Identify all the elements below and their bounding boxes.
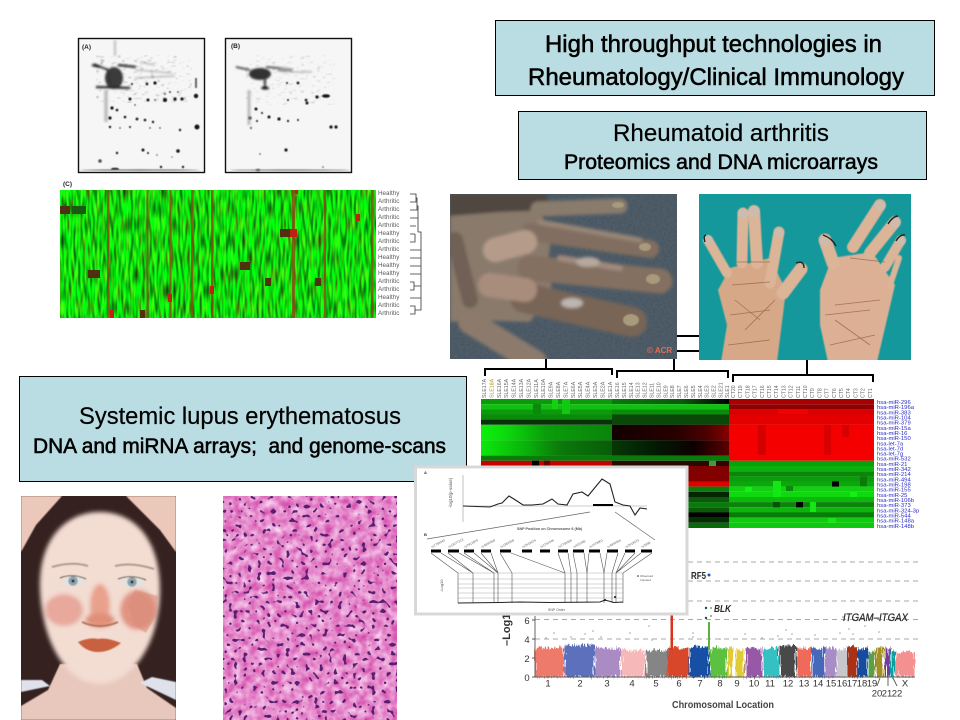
axes: [532, 616, 915, 686]
axis numbers: 18: [857, 678, 867, 690]
column labels: SLE and control samples: SLE13A: [519, 378, 525, 398]
SLE untreated column block: [481, 399, 612, 466]
sample labels: Arthritic: [378, 278, 399, 285]
column labels: SLE and control samples: SLE8A: [556, 381, 562, 398]
column labels: SLE and control samples: SLE2A: [600, 381, 606, 398]
column labels: SLE and control samples: SLE2: [712, 385, 718, 398]
column labels: SLE and control samples: CT9: [810, 388, 816, 398]
gel panel A: (A): [82, 44, 91, 51]
column labels: SLE and control samples: SLE3A: [593, 381, 599, 398]
sample labels: [378, 190, 400, 317]
miRNA row labels: hsa-miR-25: [877, 493, 908, 499]
heatmap C: proteomics: (C): [63, 181, 72, 188]
column labels: SLE and control samples: SLE12A: [526, 378, 532, 398]
column labels: SLE and control samples: CT14: [774, 385, 780, 398]
column labels: SLE and control samples: SLE7A: [563, 381, 569, 398]
miRNA row labels: hsa-miR-21: [877, 462, 907, 468]
column labels: SLE and control samples: CT11: [796, 386, 802, 398]
miRNA row labels: [877, 400, 920, 530]
photo: deformed hands: [699, 194, 911, 362]
SNP identifiers: rs13277113: [448, 537, 464, 549]
column labels: SLE and control samples: SLE14A: [512, 378, 518, 398]
miRNA row labels: hsa-miR-15a: [877, 426, 911, 432]
connector lines: [485, 336, 873, 382]
column labels: SLE and control samples: CT16: [760, 385, 766, 398]
lower SNP chart: -Log10: [439, 579, 444, 592]
heatmap C: proteomics: [60, 181, 376, 318]
SNP identifiers: rs2736340: [431, 538, 446, 549]
miRNA row labels: hsa-miR-148a: [877, 519, 915, 525]
column labels: SLE and control samples: SLE1: [725, 385, 731, 398]
sample labels: Arthritic: [378, 214, 399, 221]
sample labels: Arthritic: [378, 286, 399, 293]
heading: rheumatoid arthritis: Rheumatoid arthritis: [613, 120, 829, 147]
sample labels: Arthritic: [378, 206, 399, 213]
column labels: SLE and control samples: SLE10A: [541, 378, 547, 398]
axis numbers: 2: [524, 654, 530, 665]
sample labels: Arthritic: [378, 310, 399, 317]
sample labels: Arthritic: [378, 198, 399, 205]
miRNA row labels: hsa-miR-106b: [877, 498, 915, 504]
gene labels: RF5: [691, 571, 706, 582]
axis numbers: 12: [783, 678, 793, 690]
axis numbers: 19: [867, 678, 877, 690]
column labels: SLE and control samples: SLE5A: [578, 381, 584, 398]
column labels: SLE and control samples: SLE7: [677, 385, 683, 398]
SLE treated column block: [612, 399, 729, 528]
axis numbers: 4: [524, 635, 530, 646]
sample labels: Healthy: [378, 270, 400, 277]
axis numbers: 22: [892, 688, 902, 700]
miRNA row labels: hsa-miR-373: [877, 503, 911, 509]
column labels: SLE and control samples: SLE10: [656, 382, 662, 398]
column labels: SLE and control samples: SLE11A: [534, 379, 540, 398]
lower SNP chart: Observed: [640, 574, 653, 578]
column labels: SLE and control samples: SLE4A: [586, 381, 592, 398]
SNP identifiers: [431, 537, 651, 549]
association curve: SNP Position on Chromosome 8 (Mb): [517, 527, 583, 531]
heading: systemic lupus erythematosus: DNA and miRNA arrays; and genome-scans: [33, 435, 446, 458]
sample labels: Healthy: [378, 230, 400, 237]
SNP identifiers: rs2736336: [558, 538, 573, 549]
miRNA row labels: hsa-miR-104: [877, 416, 911, 422]
column labels: SLE and control samples: SLE12: [643, 382, 649, 398]
axis numbers: 10: [749, 678, 759, 690]
photo: swollen hand: [450, 194, 677, 362]
column labels: SLE and control samples: SLE21: [718, 382, 724, 398]
sample labels: Arthritic: [378, 238, 399, 245]
sample labels: Healthy: [378, 262, 400, 269]
column labels: SLE and control samples: [482, 378, 874, 398]
column labels: SLE and control samples: CT1: [868, 388, 874, 398]
Manhattan plot: [501, 562, 920, 711]
miRNA row labels: hsa-miR-379: [877, 421, 911, 427]
association peaks: [545, 574, 880, 650]
title box: Rheumatology/Clinical Immunology: [528, 64, 904, 91]
miRNA row labels: hsa-miR-198: [877, 482, 911, 488]
column labels: SLE and control samples: SLE8: [670, 385, 676, 398]
miRNA row labels: hsa-miR-383: [877, 410, 911, 416]
column labels: SLE and control samples: SLE14: [629, 382, 635, 398]
association curve: [424, 470, 655, 540]
axis numbers: 6: [524, 616, 530, 627]
miRNA heatmap: [481, 399, 874, 528]
association curve: A: [424, 470, 427, 475]
axis numbers: 3: [604, 678, 610, 690]
axis numbers: 8: [717, 678, 723, 690]
gel panel B: [226, 38, 352, 172]
SNP identifiers: rs1478901: [589, 538, 604, 549]
miRNA row labels: hsa-miR-155: [877, 488, 911, 494]
y axis title: –Log10: [501, 607, 513, 646]
axis numbers: X: [902, 678, 909, 690]
lower SNP chart: SNP Order: [548, 608, 566, 612]
column labels: SLE and control samples: CT7: [825, 388, 831, 398]
gene labels: ITGAM–ITGAX: [843, 612, 909, 624]
axis numbers: 16: [837, 678, 847, 690]
miRNA row labels: hsa-miR-342: [877, 467, 911, 473]
photo: histology section: [223, 496, 397, 720]
miRNA row labels: hsa-miR-494: [877, 477, 911, 483]
miRNA row labels: hsa-let-7d: [877, 446, 903, 452]
column labels: SLE and control samples: SLE16: [615, 382, 621, 398]
photo: swollen hand: © ACR: [647, 346, 672, 355]
axis numbers: 0: [524, 673, 530, 684]
column labels: SLE and control samples: CT2: [861, 388, 867, 398]
column labels: SLE and control samples: CT3: [853, 388, 859, 398]
SNP bars: [431, 550, 652, 552]
axis numbers: 17: [847, 678, 857, 690]
column labels: SLE and control samples: SLE11: [650, 383, 656, 398]
association curve: B: [424, 532, 427, 537]
column labels: SLE and control samples: SLE18A: [489, 378, 495, 398]
column labels: SLE and control samples: SLE9: [663, 385, 669, 398]
axis numbers: 5: [653, 678, 659, 690]
heading: rheumatoid arthritis: [518, 112, 926, 180]
column labels: SLE and control samples: SLE5: [691, 385, 697, 398]
column labels: SLE and control samples: CT15: [767, 385, 773, 398]
miRNA row labels: hsa-miR-148b: [877, 524, 915, 530]
column labels: SLE and control samples: CT19: [738, 385, 744, 398]
sample labels: Healthy: [378, 294, 400, 301]
miRNA row labels: hsa-miR-16: [877, 431, 908, 437]
column labels: SLE and control samples: CT18: [745, 385, 751, 398]
axis numbers: 1: [545, 678, 551, 690]
sample labels: Healthy: [378, 254, 400, 261]
axis numbers: 14: [813, 678, 823, 690]
miRNA row labels: hsa-miR-544: [877, 514, 911, 520]
column labels: SLE and control samples: SLE17A: [482, 378, 488, 398]
miRNA row labels: hsa-miR-296: [877, 400, 911, 406]
photo: malar rash: [21, 496, 176, 720]
axis numbers: 7: [697, 678, 703, 690]
column labels: SLE and control samples: SLE1A: [608, 381, 614, 398]
sample labels: Arthritic: [378, 246, 399, 253]
column labels: SLE and control samples: CT5: [839, 388, 845, 398]
column labels: SLE and control samples: SLE15: [622, 382, 628, 398]
column labels: SLE and control samples: CT10: [803, 385, 809, 398]
x axis title: Chromosomal Location: [672, 699, 774, 711]
column labels: SLE and control samples: CT4: [846, 388, 852, 398]
threshold lines: [535, 562, 920, 639]
gel panel A: [78, 38, 204, 172]
axis numbers: [524, 616, 909, 700]
miRNA row labels: hsa-miR-532: [877, 457, 911, 463]
gel panel B: (B): [231, 43, 240, 50]
lower SNP chart: [431, 553, 653, 612]
lower SNP chart: Imputed: [640, 578, 651, 582]
miRNA row labels: hsa-miR-196a: [877, 405, 915, 411]
SNP identifiers: rs2618476: [522, 538, 537, 549]
column labels: SLE and control samples: CT8: [817, 388, 823, 398]
SNP identifiers: rs2254546: [540, 538, 555, 549]
gene labels: [691, 571, 909, 624]
SNP identifiers: rs1382568: [500, 538, 515, 549]
sample labels: Arthritic: [378, 222, 399, 229]
miRNA row labels: hsa-miR-214: [877, 472, 911, 478]
column labels: SLE and control samples: CT6: [832, 388, 838, 398]
SNP identifiers: rs2618473: [625, 538, 640, 549]
miRNA row labels: hsa-let-7g: [877, 452, 903, 458]
axis numbers: 6: [676, 678, 682, 690]
column labels: SLE and control samples: SLE4: [698, 385, 704, 398]
column labels: SLE and control samples: CT12: [789, 385, 795, 398]
column labels: SLE and control samples: SLE13: [636, 382, 642, 398]
axis numbers: 11: [765, 678, 775, 690]
column labels: SLE and control samples: CT13: [781, 385, 787, 398]
control column block: [729, 399, 874, 528]
miRNA row labels: hsa-miR-324-3p: [877, 508, 920, 514]
SNP identifiers: rs922483: [573, 539, 586, 549]
heading: systemic lupus erythematosus: [20, 376, 466, 482]
gene labels: BLK: [714, 603, 732, 615]
heading: rheumatoid arthritis: Proteomics and DNA microarrays: [564, 151, 878, 174]
title box: [496, 20, 934, 96]
sample labels: Arthritic: [378, 302, 399, 309]
miRNA row labels: hsa-let-7a: [877, 441, 904, 447]
SNP identifiers: rs4840565: [607, 538, 622, 549]
SNP identifiers: rs2898: [641, 541, 651, 549]
column labels: SLE and control samples: SLE3: [705, 385, 711, 398]
dendrogram: [410, 194, 421, 314]
title box: High throughput technologies in: [545, 31, 882, 58]
heading: systemic lupus erythematosus: Systemic lupus erythematosus: [79, 403, 401, 430]
miRNA row labels: hsa-miR-150: [877, 436, 911, 442]
column labels: SLE and control samples: CT17: [753, 385, 759, 398]
SNP identifiers: rs4840568: [481, 538, 496, 549]
sample labels: Healthy: [378, 190, 400, 197]
column labels: SLE and control samples: SLE16A: [497, 378, 503, 398]
column labels: SLE and control samples: CT20: [731, 385, 737, 398]
association curve: -log10(p-value): [448, 477, 453, 508]
axis numbers: 4: [629, 678, 635, 690]
SNP identifiers: rs7812879: [464, 538, 479, 549]
axis numbers: 20: [872, 688, 882, 700]
inset: SNP association plots: [416, 467, 687, 614]
column labels: SLE and control samples: SLE6: [684, 385, 690, 398]
axis numbers: 15: [826, 678, 836, 690]
column labels: SLE and control samples: SLE15A: [504, 378, 510, 398]
axis numbers: 21: [882, 688, 892, 700]
chromosome bars: [535, 645, 915, 677]
column labels: SLE and control samples: SLE9A: [549, 381, 555, 398]
axis numbers: 9: [734, 678, 740, 690]
column labels: SLE and control samples: SLE6A: [571, 381, 577, 398]
axis numbers: 13: [799, 678, 809, 690]
axis numbers: 2: [577, 678, 583, 690]
